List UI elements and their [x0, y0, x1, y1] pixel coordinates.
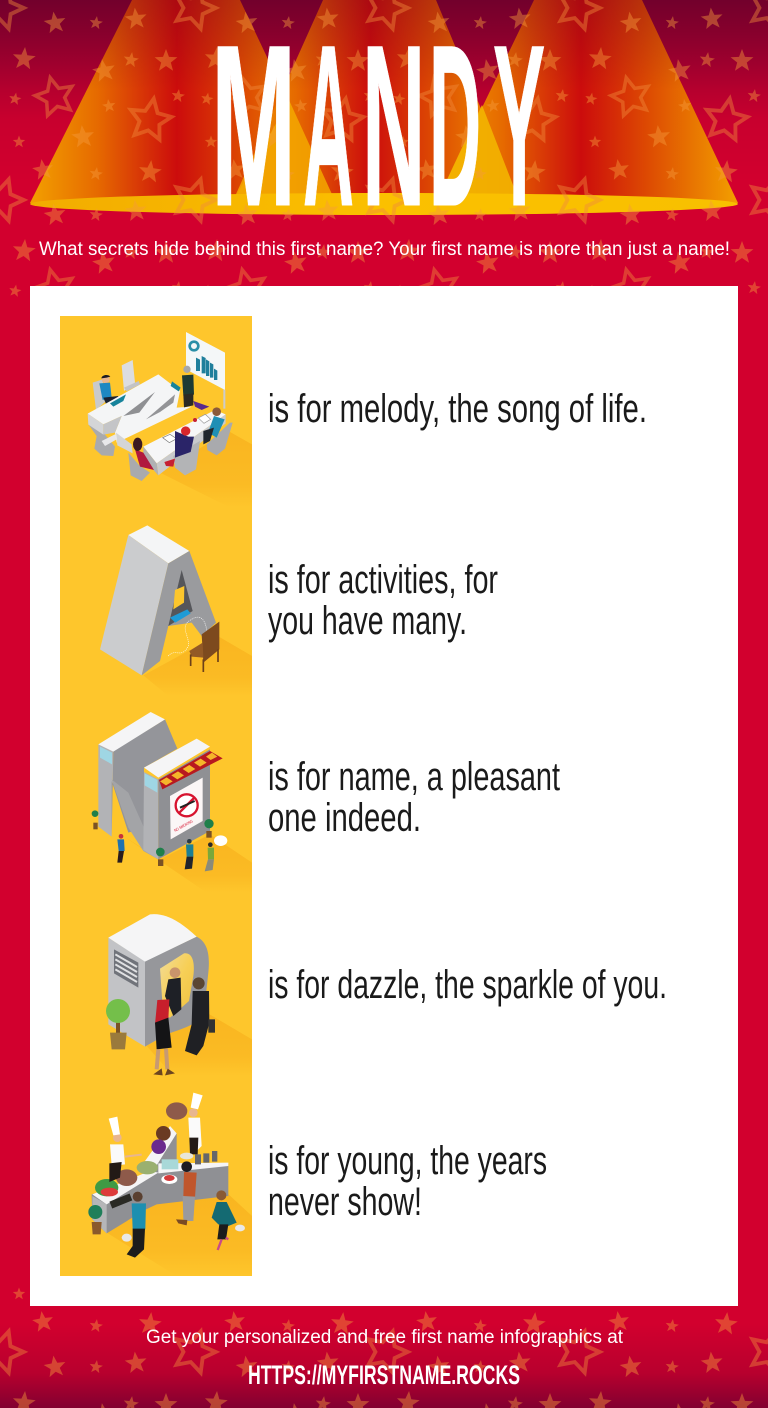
footer text: Get your personalized and free first name infographics at [146, 1327, 624, 1348]
yellow illustration column [60, 316, 252, 1276]
row: letter D [106, 914, 667, 1076]
text: A: is for activities, for [268, 558, 498, 602]
text: N: one indeed. [268, 796, 421, 840]
title: M [211, 0, 296, 254]
icon: N building [92, 712, 252, 893]
text: A: you have many. [268, 599, 467, 643]
row: letter N [92, 712, 571, 893]
icon: M conference table [88, 332, 252, 508]
title: N [362, 0, 425, 254]
sign label: NO SMOKING [173, 819, 194, 833]
icon: D building with people [106, 914, 252, 1076]
spotlight: middle [232, 0, 520, 203]
spotlight: left [30, 0, 336, 203]
title: Y [493, 0, 545, 255]
title: A [303, 0, 354, 255]
icon: A with desk [100, 525, 252, 696]
footer url: HTTPS://MYFIRSTNAME.ROCKS [248, 1360, 520, 1390]
text: Y: is for young, the years [268, 1139, 547, 1183]
text: N: is for name, a pleasant [268, 755, 560, 799]
star pattern: bottom [0, 1285, 768, 1408]
white panel [30, 286, 738, 1306]
icon: Y food counter [88, 1093, 252, 1276]
spotlight pool [30, 193, 738, 215]
title: D [429, 0, 481, 255]
text: Y: never show! [268, 1180, 422, 1224]
row: letter A [100, 525, 509, 696]
row: letter M [88, 332, 647, 508]
spotlights [0, 0, 768, 215]
subtitle: What secrets hide behind this first name? Your first name is more than just a name! [39, 239, 730, 260]
spotlight: right [436, 0, 738, 203]
title [211, 0, 545, 255]
row: letter Y [88, 1093, 558, 1276]
star pattern: top [0, 0, 768, 300]
